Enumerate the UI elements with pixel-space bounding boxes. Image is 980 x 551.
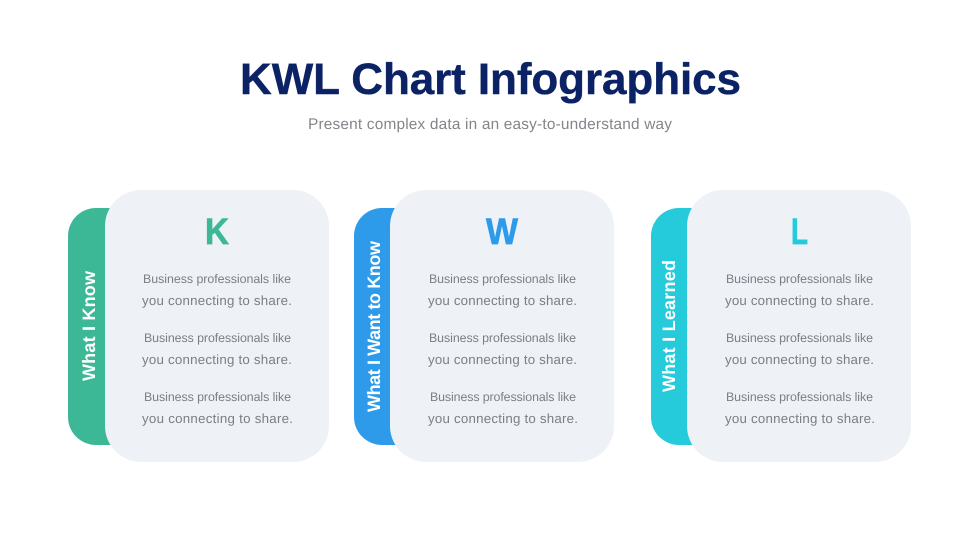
text block: L: Business professionals like (726, 390, 873, 404)
tab: What I Want to Know (354, 208, 424, 445)
text block: W: you connecting to share. (428, 293, 577, 308)
tab label: What I Know: What I Know (79, 270, 99, 381)
letter: W: W (486, 211, 518, 252)
text block: L: Business professionals like (726, 272, 873, 286)
subtitle: Present complex data in an easy-to-understand way (308, 116, 672, 133)
text block: K: you connecting to share. (142, 411, 293, 426)
tab: What I Know (68, 208, 138, 445)
text block: W (428, 272, 578, 426)
title: KWL Chart Infographics (240, 55, 741, 104)
panel: W what I want to know (354, 190, 614, 462)
text block: W: Business professionals like (429, 331, 576, 345)
text block: K: Business professionals like (143, 272, 291, 286)
panel: L what I learned (651, 190, 911, 462)
text block: K: you connecting to share. (142, 293, 292, 308)
text block: L: you connecting to share. (725, 293, 874, 308)
panel: K what I know (68, 190, 329, 462)
text block: K (142, 272, 293, 426)
text block: L (725, 272, 875, 426)
text block: L: Business professionals like (726, 331, 873, 345)
tab label: What I Want to Know: What I Want to Know (364, 240, 384, 412)
text block: W: you connecting to share. (428, 411, 578, 426)
card: W (390, 190, 614, 462)
text block: K: Business professionals like (144, 390, 291, 404)
text block: W: Business professionals like (430, 390, 576, 404)
text block: L: you connecting to share. (725, 352, 874, 367)
card: K (105, 190, 329, 462)
text block: L: you connecting to share. (725, 411, 875, 426)
tab label: What I Learned: What I Learned (659, 260, 679, 392)
letter: K: K (205, 211, 229, 252)
text block: W: Business professionals like (429, 272, 576, 286)
card: L (687, 190, 911, 462)
text block: K: Business professionals like (144, 331, 291, 345)
text block: W: you connecting to share. (428, 352, 577, 367)
tab: What I Learned (651, 208, 721, 445)
letter: L: L (791, 211, 808, 252)
text block: K: you connecting to share. (142, 352, 292, 367)
